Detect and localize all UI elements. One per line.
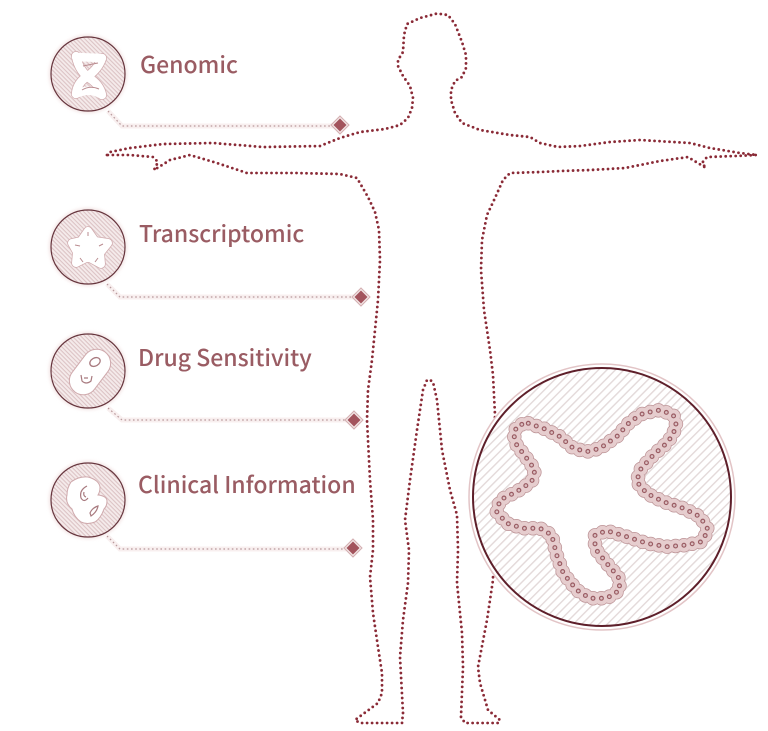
icon: embryo	[49, 461, 127, 539]
icon: cell star	[49, 208, 127, 286]
icon: DNA helix	[49, 35, 127, 113]
heading: Genomic: Genomic	[140, 46, 238, 80]
heading: Transcriptomic: Transcriptomic	[139, 215, 304, 249]
marker: diamond	[345, 411, 363, 429]
connector line	[108, 408, 348, 420]
heading: Drug Sensitivity: Drug Sensitivity	[138, 339, 312, 373]
connector line	[107, 284, 355, 297]
heading: Clinical Information: Clinical Information	[138, 466, 356, 500]
marker: diamond	[352, 288, 370, 306]
connector line	[107, 536, 346, 549]
panel: clinical information	[49, 461, 362, 557]
panel: drug sensitivity	[49, 332, 363, 429]
marker: diamond	[331, 116, 349, 134]
connector line	[108, 111, 335, 126]
panel: tissue cross-section magnifier	[469, 364, 735, 630]
marker: diamond	[344, 539, 362, 557]
panel: genomic	[49, 35, 349, 134]
panel: transcriptomic	[49, 208, 370, 306]
icon: capsule	[49, 332, 127, 410]
epithelial cell ring with lumen	[497, 410, 708, 598]
